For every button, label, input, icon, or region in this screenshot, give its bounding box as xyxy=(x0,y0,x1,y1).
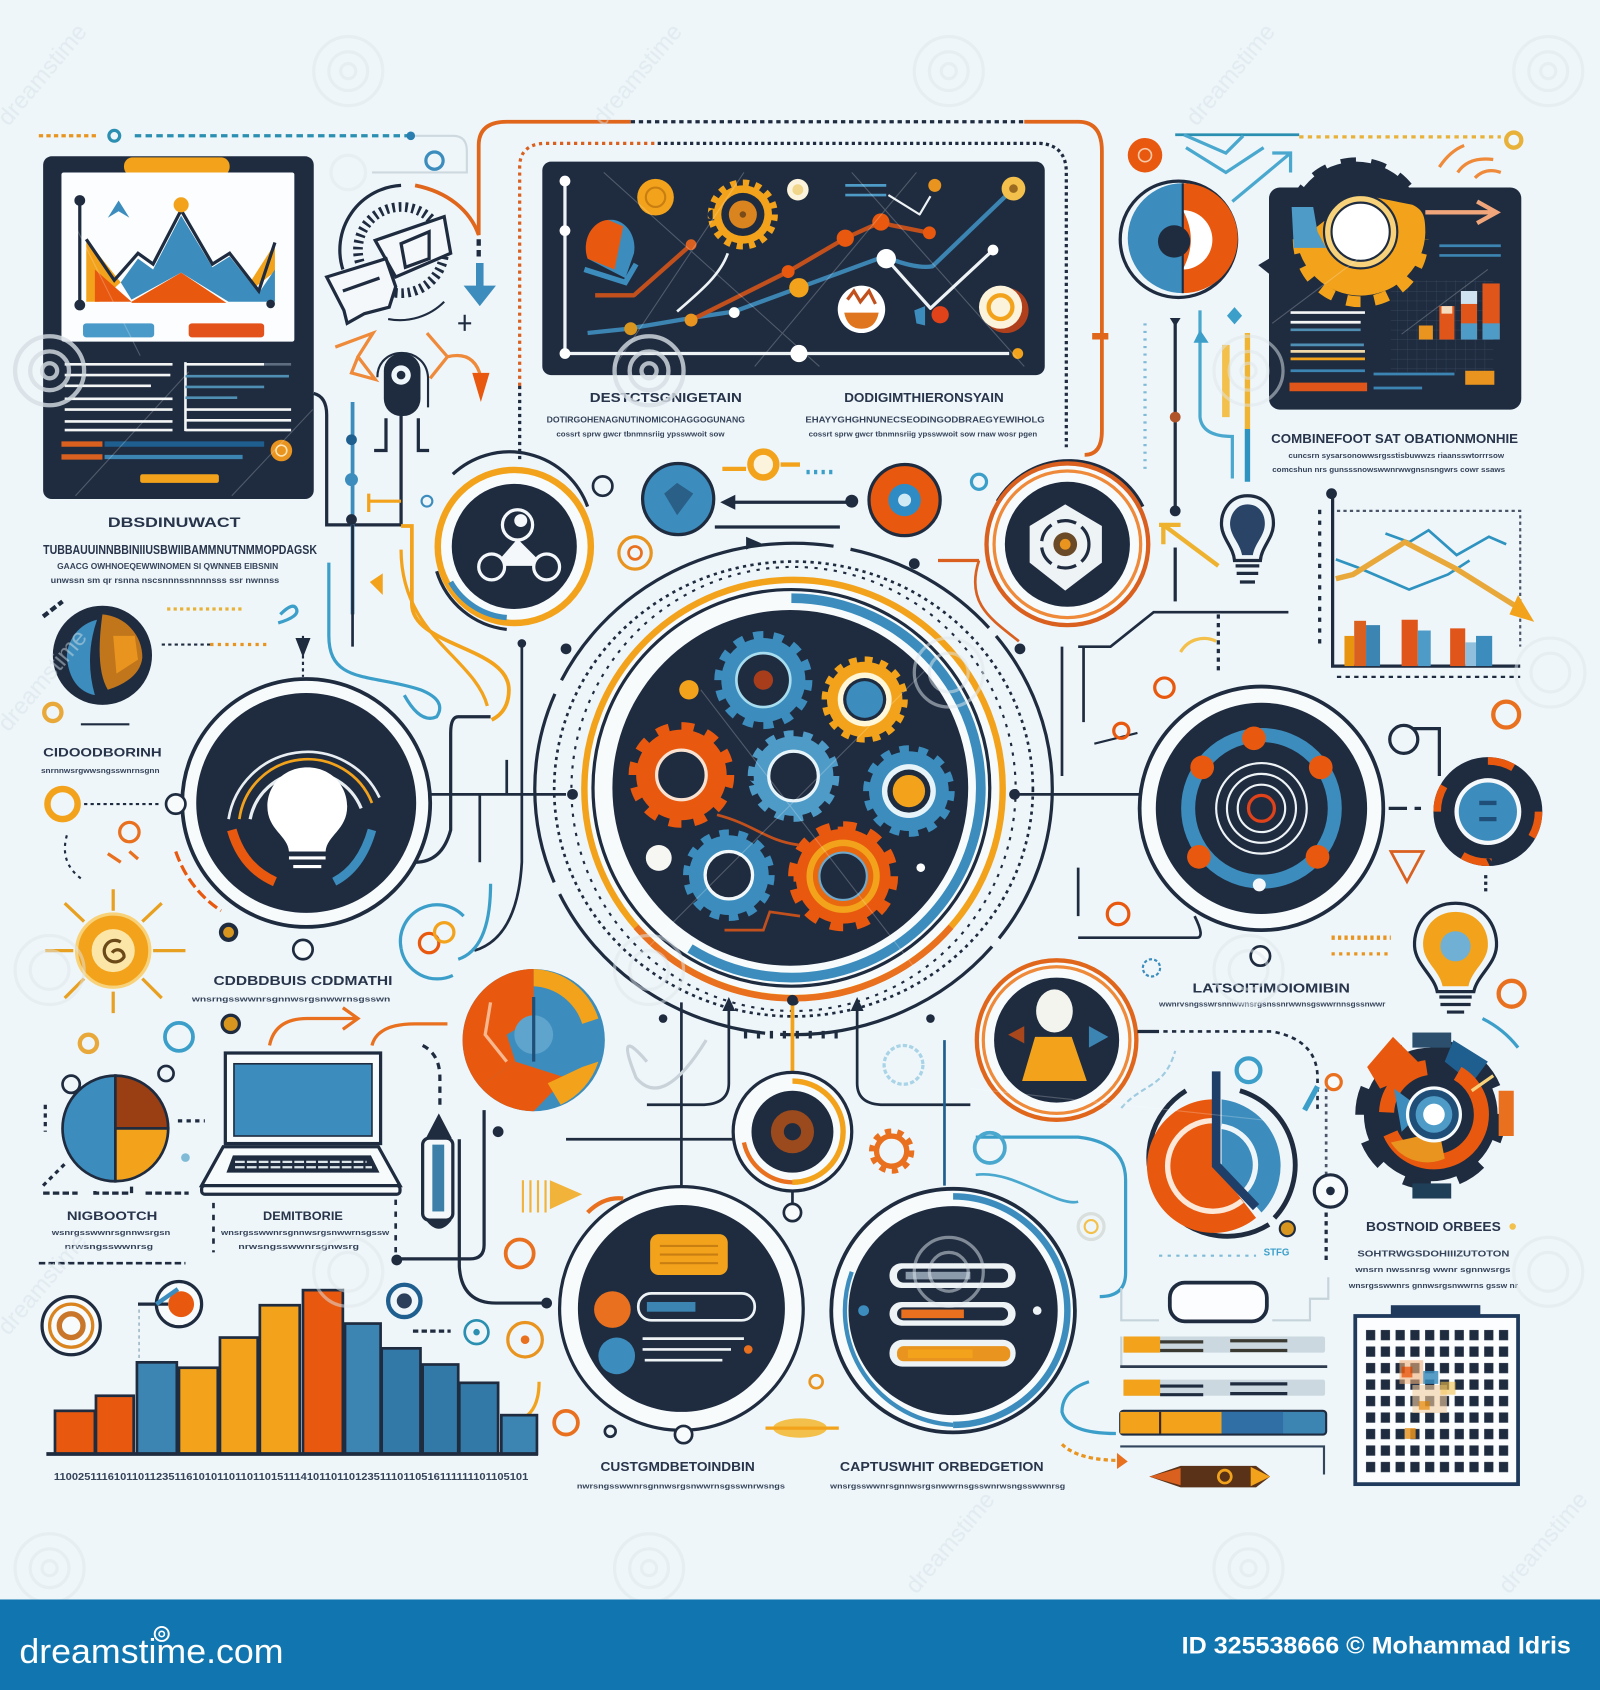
text block: left caption two: snrnnwsrgwwsngsswnrnsgnn xyxy=(41,768,160,775)
panel icons: pie, gear, coins xyxy=(584,179,1029,333)
small arrow markers xyxy=(1170,307,1242,516)
icon: small gear right xyxy=(1389,725,1539,862)
gear dots and links xyxy=(646,680,925,930)
icon: target pin xyxy=(138,1282,202,1327)
connector arrow xyxy=(720,495,858,510)
gear: blue top xyxy=(719,636,808,724)
icon: amber bug xyxy=(765,1375,839,1438)
icon: sun xyxy=(45,889,238,1013)
icon: orange disc xyxy=(1128,138,1162,172)
text block: pie and laptop captions: nrwsngsswwnrsgnwsrg xyxy=(238,1244,359,1251)
text block: lower disc captions: CUSTGMDBETOINDBIN xyxy=(601,1459,755,1474)
text block: gear caption: wnsrn nwssnrsg wwnr sgnnwsrgs xyxy=(1354,1265,1511,1274)
node: cog target disc xyxy=(987,461,1148,625)
text block: pie and laptop captions xyxy=(39,1209,390,1263)
gear: blue center xyxy=(753,735,835,817)
footer credit: ID 325538666 © Mohammad Idris xyxy=(1182,1633,1571,1659)
text block: lower disc captions: wnsrgsswwnrsgnnwsrgsnwwrnsgsswnrwsngsswwnrsg xyxy=(829,1483,1065,1490)
amber outer ring xyxy=(584,580,1003,998)
text block: pie and laptop captions: wnsrgsswwnrsgnnwsrgsnwwrnsgssw xyxy=(220,1230,390,1237)
icon: monitor and speech bubble xyxy=(327,185,451,323)
orange arrow xyxy=(1425,202,1496,223)
icon: laptop xyxy=(202,1053,400,1253)
text block: gear caption: BOSTNOID ORBEES xyxy=(1366,1219,1501,1234)
watermark text: dreamstime xyxy=(901,1487,1001,1599)
text block: left panel caption: DBSDINUWACT xyxy=(108,514,241,530)
text block: gear caption xyxy=(1348,1219,1518,1290)
icon: spiral coin xyxy=(42,1297,100,1355)
buttons xyxy=(83,323,154,337)
watermark text: dreamstime xyxy=(588,19,688,131)
center network rings xyxy=(535,543,1052,1035)
text block: right panel caption: COMBINEFOOT SAT OBATIONMONHIE xyxy=(1271,431,1518,446)
chart axes xyxy=(560,176,1023,362)
icon: pencil xyxy=(1149,1466,1270,1487)
text block: pie and laptop captions: wsnrgsswwnrsgnnwsrgsn xyxy=(50,1230,170,1237)
gear: blue bottom xyxy=(688,834,770,916)
text block: lower disc captions: nwrsngsswwnrsgnnwsrgsnwwrnsgsswnrwsngs xyxy=(577,1483,785,1490)
area chart xyxy=(74,195,275,310)
text block: left panel caption: TUBBAUUINNBBINIIUSBWIIBAMMNUTNMMOPDAGSK xyxy=(43,542,318,557)
text block: left caption two xyxy=(41,746,162,775)
text block: gear caption: wnsrgsswwnrs gnnwsrgsnwwrns gssw nr xyxy=(1348,1283,1518,1290)
gear: orange left xyxy=(634,728,729,822)
white screen xyxy=(61,172,294,342)
arrow heads into the center ring xyxy=(722,995,864,1011)
amber tab xyxy=(124,157,230,176)
chart: line and bar xyxy=(1320,488,1534,677)
text block: lower disc captions: CAPTUSWHIT ORBEDGETION xyxy=(840,1459,1044,1474)
text block: top panel captions: EHAYYGHGHNUNECSEODINGODBRAEGYEWIHOLG xyxy=(805,415,1045,424)
text block: top panel captions: cossrt sprw gwcr tbnmnsriig ypsswwoit sow rnaw wosr pgen xyxy=(809,430,1038,439)
text block: right panel caption xyxy=(1271,431,1518,474)
amber gear xyxy=(1292,194,1425,302)
node: molecule disc xyxy=(437,452,591,629)
chart data points xyxy=(624,177,1025,335)
chart bars xyxy=(1344,620,1492,666)
icon: calendar grid xyxy=(1355,1305,1518,1484)
gear: amber xyxy=(826,661,904,738)
panel text lines xyxy=(65,362,291,431)
icon: orange disc with blue core xyxy=(869,465,940,536)
left mid marks xyxy=(47,789,162,878)
node: small dial lower center xyxy=(733,1072,852,1221)
text block: sun caption: CDDBDBUIS CDDMATHI xyxy=(213,973,392,988)
progress bars xyxy=(1120,1336,1327,1474)
text block: left panel caption: GAACG OWHNOEQEWWINOMEN SI QWNNEB EIBSNIN xyxy=(57,561,278,571)
text block: right panel caption: comcshun nrs gunsssnowswwnrwwgnsnsngwrs cowr ssaws xyxy=(1272,465,1505,474)
icon: small orange gear xyxy=(872,1132,911,1170)
text block: improvements caption: LATSOITIMOIOMIBIN xyxy=(1192,981,1350,996)
panel: gear camera report xyxy=(1258,162,1521,410)
icon: amber ring xyxy=(722,452,800,477)
icon: dial pie xyxy=(1147,1058,1347,1259)
text block: right panel caption: cuncsrn sysarsonowwsrgsstisbuwwzs riaansswtorrrsow xyxy=(1288,451,1504,460)
text block: pie and laptop captions: DEMITBORIE xyxy=(263,1209,343,1223)
node: person disc xyxy=(977,960,1159,1120)
watermark text: dreamstime xyxy=(1181,19,1281,131)
panel: dashboard report xyxy=(43,156,314,499)
wires: left column connectors xyxy=(176,393,1288,979)
footer logo: dreamstime.com xyxy=(19,1633,284,1671)
center ring nodes xyxy=(561,537,1025,1023)
central gears disc xyxy=(584,580,1003,998)
icon: blue disc xyxy=(643,463,714,535)
icon: dial pie: STFG xyxy=(1264,1248,1289,1259)
icon: bulb right xyxy=(1415,903,1497,1012)
node: list disc right xyxy=(831,1189,1075,1432)
watermark text: dreamstime xyxy=(1494,1487,1594,1599)
text block: improvements caption: wwnrvsngsswrsnnwwnsrgsnssnrwwnsgswwrnnsgssnwwr xyxy=(1158,1002,1386,1009)
text block: sun caption: wnsrngsswwnrsgnnwsrgsnwwrnsgsswn xyxy=(191,994,391,1003)
panel lines xyxy=(1291,246,1501,388)
node: list disc left xyxy=(560,1187,803,1443)
text block: top panel captions: cossrt sprw gwcr tbnmnsriig ypsswwoit sow xyxy=(556,430,725,439)
text block: top panel captions: DESTCTSGNIGETAIN xyxy=(590,390,742,405)
text block: top panel captions xyxy=(547,390,1045,439)
text block: left caption two: CIDOODBORINH xyxy=(43,746,162,760)
bar chart axis text: 1100251116101101123511610101101101101511141011011012351110110516111111101105101 xyxy=(54,1472,529,1483)
icon: small bulb top right xyxy=(1221,496,1273,582)
text block: lower disc captions xyxy=(577,1459,1065,1490)
small rings above laptop xyxy=(80,1008,447,1110)
gear: orange bottom xyxy=(794,827,893,926)
icon: globe left xyxy=(43,601,297,724)
icon: pie left xyxy=(43,1076,205,1193)
node: target circle right xyxy=(1140,687,1383,966)
watermark hairlines xyxy=(65,172,1488,1121)
text block: sun caption xyxy=(191,973,392,1003)
text block: left panel caption xyxy=(43,514,318,585)
top wiring connectors xyxy=(39,122,1108,461)
right small marks xyxy=(1332,702,1525,1048)
text block: top panel captions: DODIGIMTHIERONSYAIN xyxy=(844,390,1004,405)
icon: white pill xyxy=(1170,1283,1267,1321)
text block: improvements caption xyxy=(1158,981,1386,1009)
chart lines xyxy=(588,185,1013,333)
icon: large gear xyxy=(1364,1033,1514,1199)
lower center wires xyxy=(566,1002,1328,1469)
left lower marks xyxy=(139,1180,616,1437)
icon: half eye dial xyxy=(1120,181,1238,297)
top right connectors xyxy=(1145,133,1521,601)
text block: left panel caption: unwssn sm qr rsnna nscsnnnssnnnnsss ssr nwnnss xyxy=(51,575,279,585)
calendar colored cells xyxy=(1399,1360,1456,1439)
icon: pen marker xyxy=(391,1110,552,1308)
icon: device with orange arrows xyxy=(335,333,489,526)
bar chart xyxy=(46,1290,538,1454)
watermark marks on panels xyxy=(15,336,684,405)
text block: gear caption: SOHTRWGSDOHIIIZUTOTON xyxy=(1357,1249,1509,1259)
text block: top panel captions: DOTIRGOHENAGNUTINOMICOHAGGOGUNANG xyxy=(547,415,745,424)
text block: pie and laptop captions: NIGBOOTCH xyxy=(67,1209,157,1223)
icon: color pie center bottom xyxy=(463,969,605,1111)
text block: pie and laptop captions: nrwsngsswwnrsg xyxy=(65,1244,153,1251)
gear: blue right xyxy=(868,750,950,832)
footer bar xyxy=(0,1599,1600,1690)
top center small nodes xyxy=(593,452,987,569)
panel bars xyxy=(1419,283,1500,340)
node: lightbulb circle left xyxy=(166,636,430,959)
panel: growth chart xyxy=(542,162,1045,375)
blue arc ring xyxy=(690,598,981,978)
